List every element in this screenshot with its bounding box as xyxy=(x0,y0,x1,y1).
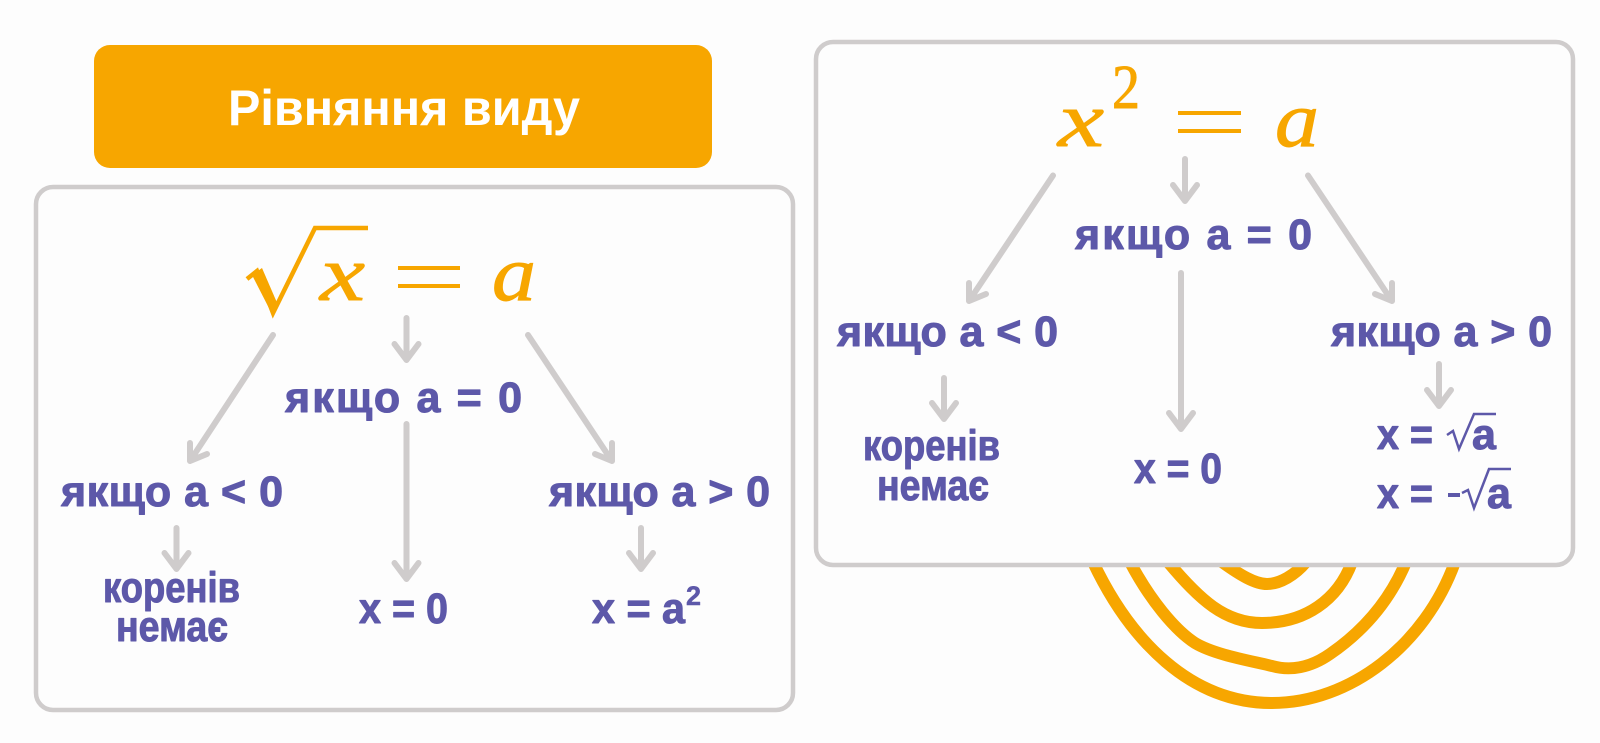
result: x equals 0: x = 0 xyxy=(1134,445,1222,493)
result: no roots xyxy=(863,422,1000,510)
result: x equals plus root a xyxy=(1377,411,1497,459)
arrow: to a greater than 0 xyxy=(528,335,612,461)
result: x equals a squared: x = a xyxy=(592,585,686,633)
condition: a equals 0: якщо a = 0 xyxy=(1074,211,1312,259)
result: x equals plus root a: x = xyxy=(1377,411,1433,459)
arrow: to a greater than 0 xyxy=(1308,176,1392,301)
result: no roots: коренів xyxy=(103,564,240,612)
formula: square root of x equals a: x xyxy=(319,230,365,317)
formula: x squared equals a: x xyxy=(1057,76,1104,163)
arrow: a equals 0 result xyxy=(394,424,418,579)
condition: a equals 0: якщо a = 0 xyxy=(284,374,522,422)
arrow: to a less than 0 xyxy=(190,335,273,461)
title banner: Рівняння виду xyxy=(228,80,580,136)
decorative orange concentric arcs xyxy=(1093,562,1455,703)
arrow: to a equals 0 xyxy=(1173,159,1197,201)
result: x equals a squared: 2 xyxy=(686,581,701,611)
formula: x squared equals a: a xyxy=(1275,76,1319,163)
result: no roots: коренів xyxy=(863,422,1000,470)
formula: x squared equals a: 2 xyxy=(1112,54,1140,122)
arrow: a greater than 0 result xyxy=(1427,364,1451,406)
result: no roots: немає xyxy=(116,603,228,651)
result: no roots xyxy=(103,564,240,651)
formula: square root of x equals a: a xyxy=(492,230,536,317)
result: x equals plus root a: a xyxy=(1472,411,1497,459)
condition: a less than 0: якщо a < 0 xyxy=(60,468,283,516)
panel: x squared equation xyxy=(816,42,1573,565)
condition: a greater than 0: якщо a > 0 xyxy=(1330,308,1552,356)
title banner xyxy=(94,45,712,168)
arrow: a equals 0 result xyxy=(1169,273,1193,429)
arrow: a less than 0 result xyxy=(164,528,188,569)
result: x equals 0: x = 0 xyxy=(359,585,448,633)
condition: a less than 0: якщо a < 0 xyxy=(836,308,1058,356)
arrow: a less than 0 result xyxy=(932,378,956,419)
arrow: to a less than 0 xyxy=(969,176,1053,301)
arrow: a greater than 0 result xyxy=(629,528,653,569)
panel: square root equation xyxy=(36,187,793,710)
result: x equals minus root a: a xyxy=(1487,470,1512,518)
arrow: to a equals 0 xyxy=(394,318,418,360)
formula: x squared equals a xyxy=(1057,54,1319,163)
result: x equals minus root a: x = xyxy=(1377,470,1433,518)
formula: square root of x equals a xyxy=(247,228,536,317)
condition: a greater than 0: якщо a > 0 xyxy=(548,468,770,516)
result: x equals minus root a xyxy=(1377,469,1512,518)
result: no roots: немає xyxy=(877,462,989,510)
